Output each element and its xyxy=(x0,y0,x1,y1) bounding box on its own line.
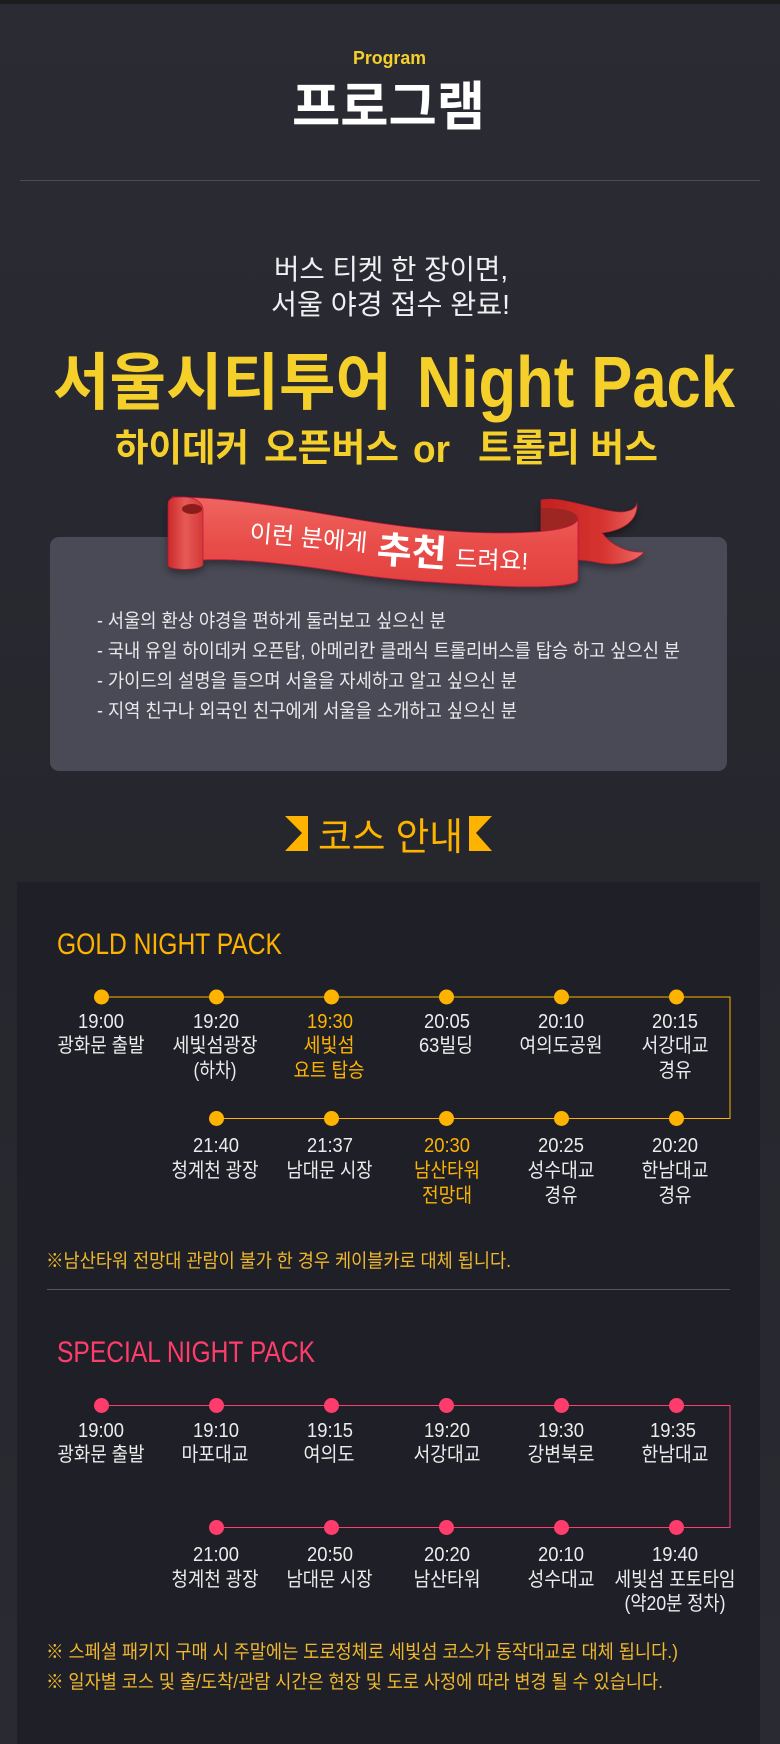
stop 19:00: 19:00 xyxy=(78,1420,124,1442)
stop 19:20: 19:20 xyxy=(193,1011,239,1033)
stop 20:30 xyxy=(414,1111,480,1207)
panel: courses xyxy=(17,882,760,1744)
intro text: 버스 티켓 한 장이면, xyxy=(274,254,508,285)
recommendation list: - 국내 유일 하이데커 오픈탑, 아메리칸 클래식 트롤리버스를 탑승 하고 싶으신 분 xyxy=(97,640,680,662)
stop 19:00 xyxy=(58,990,144,1057)
stop 20:15 xyxy=(642,990,708,1082)
stop 20:25: 성수대교 xyxy=(528,1159,594,1182)
stop 19:20 xyxy=(414,1398,480,1466)
stop 20:25: 20:25 xyxy=(538,1135,584,1157)
stop 20:15: 경유 xyxy=(658,1059,692,1082)
stop 20:10: 20:10 xyxy=(538,1011,584,1033)
recommendation list: - 서울의 환상 야경을 편하게 둘러보고 싶으신 분 xyxy=(97,610,446,632)
stop 20:15: 20:15 xyxy=(652,1011,698,1033)
main title: Night Pack xyxy=(417,343,736,423)
stop 19:10: 19:10 xyxy=(193,1420,239,1442)
stop 20:20: 남산타워 xyxy=(414,1568,480,1591)
subtitle: 오픈버스 xyxy=(264,428,399,470)
stop 19:00: 19:00 xyxy=(78,1011,124,1033)
stop 20:05: 20:05 xyxy=(424,1011,470,1033)
panel: recommendation xyxy=(50,537,727,771)
stop 19:15: 19:15 xyxy=(307,1420,353,1442)
stop 20:50: 20:50 xyxy=(307,1544,353,1566)
stop 21:37 xyxy=(286,1111,372,1182)
recommendation list xyxy=(97,610,680,722)
stop 20:20 xyxy=(414,1520,480,1591)
stop 20:10 xyxy=(528,1520,594,1591)
title: 프로그램: 프로그램 xyxy=(292,78,485,137)
stop 20:50: 남대문 시장 xyxy=(286,1568,372,1591)
subtitle: or xyxy=(413,429,450,471)
ribbon roll xyxy=(168,497,203,569)
stop 19:30: 요트 탑승 xyxy=(294,1059,364,1082)
stop 20:20 xyxy=(642,1111,708,1207)
stop 19:20: 19:20 xyxy=(424,1420,470,1442)
stop 21:40 xyxy=(172,1111,258,1182)
notes: special pack: ※ 스페셜 패키지 구매 시 주말에는 도로정체로 세빛섬 코스가 동작대교로 대체 됩니다.) xyxy=(46,1641,678,1663)
ribbon body xyxy=(172,497,578,587)
stop 19:35: 19:35 xyxy=(650,1420,696,1442)
stop 19:10: 마포대교 xyxy=(182,1443,248,1466)
stop 19:20: 서강대교 xyxy=(414,1443,480,1466)
stop 20:10: 성수대교 xyxy=(528,1568,594,1591)
ribbon banner xyxy=(168,497,644,587)
stop 19:20 xyxy=(172,990,258,1082)
stop 20:20: 경유 xyxy=(658,1184,692,1207)
stop 20:25 xyxy=(528,1111,594,1207)
stop 19:40: (약20분 정차) xyxy=(624,1592,726,1615)
stop 19:00: 광화문 출발 xyxy=(58,1443,144,1466)
stop 19:20: (하차) xyxy=(194,1059,236,1082)
stop 20:30: 20:30 xyxy=(424,1135,470,1157)
stop 21:40: 청계천 광장 xyxy=(172,1159,258,1182)
stop 21:00: 청계천 광장 xyxy=(172,1568,258,1591)
note: gold pack: ※남산타워 전망대 관람이 불가 한 경우 케이블카로 대체 됩니다. xyxy=(46,1250,511,1272)
stop 20:20: 20:20 xyxy=(424,1544,470,1566)
stop 20:10 xyxy=(520,990,602,1057)
icon: left marker xyxy=(285,816,308,851)
stop 19:30: 19:30 xyxy=(307,1011,353,1033)
stop 19:40: 19:40 xyxy=(652,1544,698,1566)
subtitle: 트롤리 버스 xyxy=(478,428,658,470)
timeline: special xyxy=(58,1398,736,1615)
stop 19:20: 세빛섬광장 xyxy=(172,1034,258,1057)
heading: special night pack: SPECIAL NIGHT PACK xyxy=(57,1336,315,1369)
subtitle: 하이데커 xyxy=(115,428,249,470)
notes: special pack: ※ 일자별 코스 및 출/도착/관람 시간은 현장 및 도로 사정에 따라 변경 될 수 있습니다. xyxy=(46,1671,663,1693)
heading text: 코스 안내 xyxy=(318,817,463,859)
recommendation list: - 가이드의 설명을 들으며 서울을 자세하고 알고 싶으신 분 xyxy=(97,670,517,692)
stop 19:30 xyxy=(528,1398,594,1466)
stop 19:40 xyxy=(614,1520,736,1615)
stop 19:00 xyxy=(58,1398,144,1466)
timeline: gold xyxy=(58,990,730,1207)
stop 20:10: 여의도공원 xyxy=(520,1034,602,1057)
stop 20:30: 전망대 xyxy=(422,1184,472,1207)
stop 21:37: 21:37 xyxy=(307,1135,353,1157)
ribbon text xyxy=(248,520,529,576)
stop 19:30: 19:30 xyxy=(538,1420,584,1442)
stop 20:50 xyxy=(286,1520,372,1591)
stop 21:40: 21:40 xyxy=(193,1135,239,1157)
intro text: 서울 야경 접수 완료! xyxy=(271,289,510,320)
stop 19:10 xyxy=(182,1398,248,1466)
stop 19:30: 강변북로 xyxy=(528,1443,594,1466)
stop 19:15 xyxy=(304,1398,354,1466)
stop 20:20: 한남대교 xyxy=(642,1159,708,1182)
stop 20:10: 20:10 xyxy=(538,1544,584,1566)
stop 19:35 xyxy=(642,1398,708,1466)
stop 21:00: 21:00 xyxy=(193,1544,239,1566)
intro text xyxy=(271,254,510,320)
stop 19:15: 여의도 xyxy=(304,1443,354,1466)
ribbon text: 드려요! xyxy=(455,546,529,576)
stop 19:40: 세빛섬 포토타임 xyxy=(614,1568,736,1591)
subtitle xyxy=(115,428,658,471)
stop 20:05: 63빌딩 xyxy=(419,1034,473,1057)
stop 19:00: 광화문 출발 xyxy=(58,1034,144,1057)
recommendation list: - 지역 친구나 외국인 친구에게 서울을 소개하고 싶으신 분 xyxy=(97,700,517,722)
stop 20:25: 경유 xyxy=(544,1184,578,1207)
ribbon tail xyxy=(541,499,644,564)
ribbon text: 이런 분에게 xyxy=(248,520,368,557)
notes: special pack xyxy=(46,1641,678,1693)
stop 20:15: 서강대교 xyxy=(642,1034,708,1057)
stop 20:05 xyxy=(419,990,473,1057)
main title: 서울시티투어 xyxy=(53,349,392,418)
stop 19:30: 세빛섬 xyxy=(304,1034,354,1057)
ribbon text: 추천 xyxy=(375,529,448,575)
icon: right marker xyxy=(469,816,492,851)
stop 21:00 xyxy=(172,1520,258,1591)
stop 21:37: 남대문 시장 xyxy=(286,1159,372,1182)
section heading: course guide xyxy=(285,816,492,859)
stop 20:30: 남산타워 xyxy=(414,1159,480,1182)
stop 19:35: 한남대교 xyxy=(642,1443,708,1466)
stop 20:20: 20:20 xyxy=(652,1135,698,1157)
stop 19:30 xyxy=(294,990,364,1082)
heading: gold night pack: GOLD NIGHT PACK xyxy=(57,928,282,961)
main title xyxy=(53,343,736,423)
heading: Program: Program xyxy=(353,48,426,68)
